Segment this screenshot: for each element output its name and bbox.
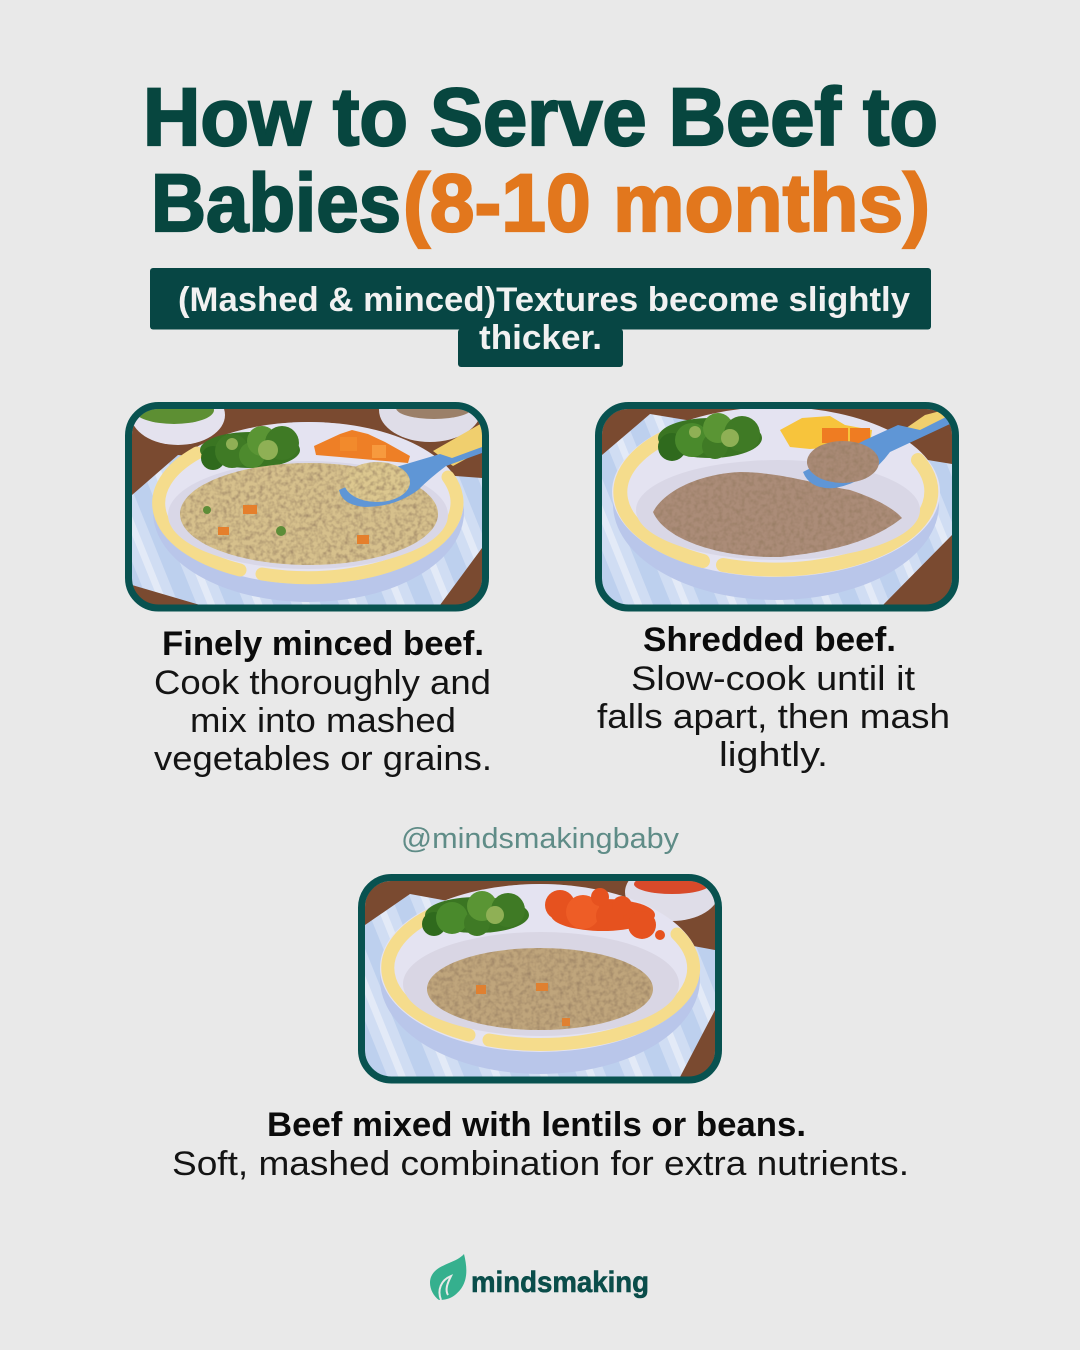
subtitle banner: thicker. xyxy=(479,319,602,357)
logo: mindsmaking xyxy=(471,1266,649,1299)
tomatoes xyxy=(545,888,665,940)
photo: shredded beef plate xyxy=(598,406,956,608)
text: finely minced beef: Cook thoroughly and xyxy=(154,664,491,702)
photo: beef with lentils plate xyxy=(362,863,719,1080)
spoon xyxy=(339,423,482,507)
cubes xyxy=(780,416,872,449)
social handle: @mindsmakingbaby xyxy=(401,823,680,855)
text: finely minced beef: mix into mashed xyxy=(190,702,456,740)
subtitle banner xyxy=(150,268,931,367)
title xyxy=(143,72,938,249)
text: finely minced beef: vegetables or grains. xyxy=(154,740,492,778)
photo: finely minced beef plate xyxy=(128,378,486,608)
logo xyxy=(430,1254,649,1300)
title: How to Serve Beef to xyxy=(143,72,938,163)
text: beef with lentils: Soft, mashed combination for extra nutrients. xyxy=(172,1145,909,1183)
text: shredded beef: Shredded beef. xyxy=(643,621,896,659)
text: shredded beef: lightly. xyxy=(719,736,828,774)
icon: leaf xyxy=(430,1254,466,1300)
text: shredded beef xyxy=(597,621,950,774)
text: finely minced beef: Finely minced beef. xyxy=(162,625,484,663)
title: (8-10 months) xyxy=(403,158,930,249)
text: beef with lentils: Beef mixed with lentils or beans. xyxy=(267,1106,806,1144)
carrots xyxy=(314,430,410,463)
subtitle banner: (Mashed & minced)Textures become slightly xyxy=(178,281,910,319)
spoon xyxy=(803,409,952,488)
title: Babies xyxy=(151,158,401,249)
text: shredded beef: falls apart, then mash xyxy=(597,698,950,736)
text: finely minced beef xyxy=(154,625,492,778)
text: shredded beef: Slow-cook until it xyxy=(631,660,916,698)
broccoli xyxy=(658,413,762,461)
broccoli xyxy=(422,891,529,936)
text: beef with lentils xyxy=(172,1106,909,1183)
broccoli xyxy=(200,426,300,470)
